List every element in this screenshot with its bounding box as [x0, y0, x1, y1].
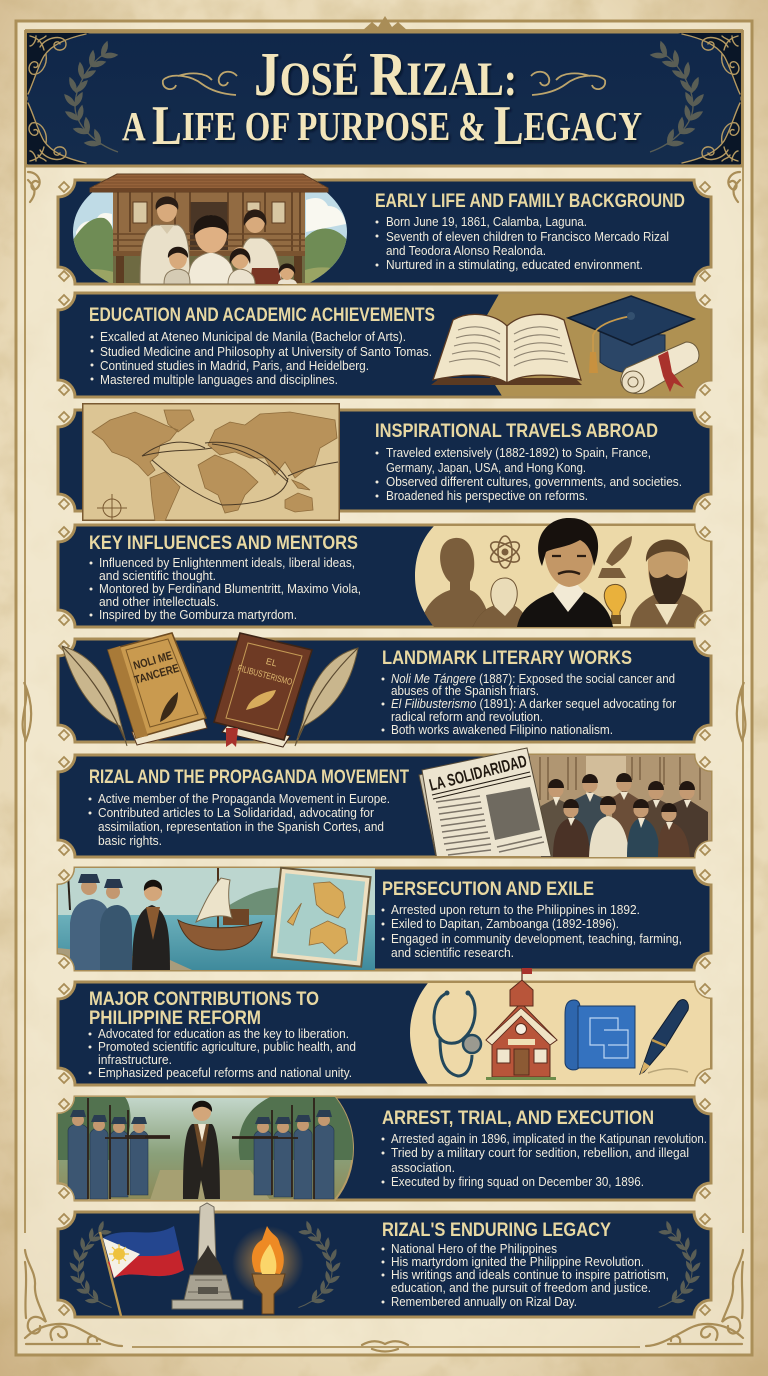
- icon: eternal flame torch: [232, 1226, 304, 1314]
- text block: Advocated for education as the key to liberation.: [98, 1026, 349, 1041]
- text block: Contributed articles to La Solidaridad, advocating for: [98, 805, 375, 820]
- heading: LANDMARK LITERARY WORKS: [382, 647, 632, 669]
- title: IFE OF PURPOSE &: [182, 103, 494, 149]
- icon: left laurel: [70, 1222, 112, 1308]
- title: EGACY: [524, 103, 642, 149]
- heading: PHILIPPINE REFORM: [89, 1007, 261, 1029]
- text block: Seventh of eleven children to Francisco Mercado Rizal: [386, 229, 669, 244]
- text block: Broadened his perspective on reforms.: [386, 488, 588, 503]
- text block: [382, 1241, 669, 1309]
- panel: key influences and mentors: [58, 518, 711, 627]
- heading: RIZAL'S ENDURING LEGACY: [382, 1219, 611, 1241]
- text block: [88, 791, 390, 848]
- text block: Continued studies in Madrid, Paris, and Heidelberg.: [100, 358, 369, 373]
- text block: Executed by firing squad on December 30, 1896.: [391, 1174, 644, 1189]
- icon: philippine flag: [100, 1226, 184, 1316]
- illustration: open book, graduation cap and diploma: [431, 294, 710, 396]
- title: L: [152, 95, 182, 157]
- illustration: firing squad scene: [58, 1097, 353, 1200]
- text block: [382, 671, 677, 737]
- text block: Arrested again in 1896, implicated in the Katipunan revolution.: [391, 1131, 707, 1146]
- book title: Noli Me Tangere: NOLI ME: [132, 650, 174, 673]
- text block: Excalled at Ateneo Municipal de Manila (Bachelor of Arts).: [100, 329, 406, 344]
- icon: banner corner scrollwork: [27, 33, 741, 164]
- illustration: arrest scene with boat: [58, 862, 375, 975]
- text block: Promoted scientific agriculture, public health, and: [98, 1039, 356, 1054]
- panel: rizal and the propaganda movement: [58, 748, 711, 860]
- text block: [90, 555, 361, 622]
- illustration: portraits of mentors: [415, 518, 710, 627]
- panel: major contributions to philippine reform: [58, 968, 711, 1085]
- text block: Germany, Japan, USA, and Hong Kong.: [386, 460, 586, 475]
- text block: Emphasized peaceful reforms and national unity.: [98, 1065, 352, 1080]
- text block: Studied Medicine and Philosophy at University of Santo Tomas.: [100, 344, 432, 359]
- text block: Inspired by the Gomburza martyrdom.: [99, 607, 297, 622]
- icon: rizal monument: [172, 1203, 243, 1309]
- heading: PERSECUTION AND EXILE: [382, 878, 594, 900]
- book title: El Filibusterismo: FILIBUSTERISMO: [237, 663, 293, 687]
- title: [122, 41, 642, 157]
- text block: education, and the pursuit of freedom and justice.: [391, 1280, 651, 1295]
- heading: [89, 988, 319, 1029]
- text block: His martyrdom ignited the Philippine Revolution.: [391, 1254, 644, 1269]
- illustration: novels and quills: [62, 633, 358, 747]
- panel: education and academic achievements: [58, 293, 711, 397]
- text block: and scientific research.: [391, 945, 514, 960]
- heading: ARREST, TRIAL, AND EXECUTION: [382, 1107, 654, 1129]
- title: A: [122, 103, 149, 149]
- text block: and other intellectuals.: [99, 594, 219, 609]
- panel: title banner: [26, 32, 742, 166]
- icon: bottom right corner scroll: [646, 1250, 743, 1346]
- title: JOSÉ RIZAL:: [254, 41, 517, 109]
- text block: Exiled to Dapitan, Zamboanga (1892-1896).: [391, 916, 619, 931]
- text block: Tried by a military court for sedition, rebellion, and illegal: [391, 1145, 689, 1160]
- heading: KEY INFLUENCES AND MENTORS: [89, 532, 358, 554]
- text block: and Teodora Alonso Realonda.: [386, 243, 546, 258]
- text block: His writings and ideals continue to inspire patriotism,: [391, 1267, 669, 1282]
- icon: right laurel: [658, 1222, 700, 1308]
- text block: Engaged in community development, teaching, farming,: [391, 931, 682, 946]
- text block: abuses of the Spanish friars.: [391, 683, 539, 698]
- text block: Arrested upon return to the Philippines in 1892.: [391, 902, 640, 917]
- icon: right flourish: [531, 72, 605, 95]
- heading: MAJOR CONTRIBUTIONS TO: [89, 988, 319, 1010]
- text block: basic rights.: [98, 833, 162, 848]
- icon: centre laurel: [298, 1222, 340, 1308]
- panel: rizal's enduring legacy: [58, 1203, 711, 1317]
- icon: bottom left corner scroll: [25, 1250, 122, 1346]
- text block: Montored by Ferdinand Blumentritt, Maximo Viola,: [99, 581, 361, 596]
- heading: EDUCATION AND ACADEMIC ACHIEVEMENTS: [89, 304, 435, 326]
- heading: EARLY LIFE AND FAMILY BACKGROUND: [375, 190, 685, 212]
- icon: left laurel: [65, 42, 118, 152]
- text block: El Filibusterismo (1891): A darker sequel advocating for: [391, 696, 677, 711]
- text block: Mastered multiple languages and disciplines.: [100, 372, 338, 387]
- text block: Noli Me Tángere (1887): Exposed the social cancer and: [391, 671, 675, 686]
- panel: inspirational travels abroad: [58, 403, 711, 521]
- text block: Observed different cultures, governments, and societies.: [386, 474, 682, 489]
- portrait: Rizal: [517, 518, 613, 627]
- text block: assimilation, representation in the Spanish Cortes, and: [98, 819, 384, 834]
- book title: El Filibusterismo: [237, 649, 297, 687]
- illustration: stethoscope, schoolhouse, blueprint, pen: [410, 968, 710, 1084]
- illustration: propagandists group portrait: [530, 755, 711, 857]
- text block: Nurtured in a stimulating, educated environment.: [386, 257, 643, 272]
- icon: right laurel: [650, 42, 703, 152]
- text block: Traveled extensively (1882-1892) to Spain, France,: [386, 445, 651, 460]
- icon: left flourish: [163, 72, 237, 95]
- panel corner ornaments: [59, 182, 710, 1315]
- illustration: family and bahay kubo: [70, 174, 350, 285]
- masthead: LA SOLIDARIDAD: [427, 751, 529, 795]
- illustration: La Solidaridad newspaper: [419, 748, 552, 860]
- book title: El Filibusterismo: EL: [265, 656, 278, 669]
- text block: [90, 329, 432, 387]
- text block: [376, 214, 669, 272]
- illustration: antique world map with routes: [82, 403, 340, 521]
- text block: [382, 902, 682, 960]
- text block: Born June 19, 1861, Calamba, Laguna.: [386, 214, 587, 229]
- text block: and scientific thought.: [99, 568, 216, 583]
- text block: radical reform and revolution.: [391, 709, 543, 724]
- text block: Influenced by Enlightenment ideals, liberal ideas,: [99, 555, 355, 570]
- text block: infrastructure.: [98, 1052, 172, 1067]
- text block: association.: [391, 1160, 455, 1175]
- text block: [382, 1131, 707, 1189]
- heading: INSPIRATIONAL TRAVELS ABROAD: [375, 420, 658, 442]
- panel: persecution and exile: [58, 862, 711, 975]
- text block: [376, 445, 682, 503]
- book title: Noli Me Tangere: TANCERE: [133, 663, 181, 687]
- panel: early life and family background: [58, 174, 711, 285]
- panel: arrest, trial, and execution: [58, 1097, 711, 1200]
- text block: National Hero of the Philippines: [391, 1241, 557, 1256]
- panel: landmark literary works: [58, 633, 711, 747]
- text block: Both works awakened Filipino nationalism.: [391, 722, 613, 737]
- text block: Remembered annually on Rizal Day.: [391, 1294, 577, 1309]
- text block: [88, 1026, 356, 1080]
- heading: RIZAL AND THE PROPAGANDA MOVEMENT: [89, 766, 409, 788]
- book title: Noli Me Tangere: [129, 649, 181, 687]
- title: L: [494, 95, 524, 157]
- text block: Active member of the Propaganda Movement in Europe.: [98, 791, 390, 806]
